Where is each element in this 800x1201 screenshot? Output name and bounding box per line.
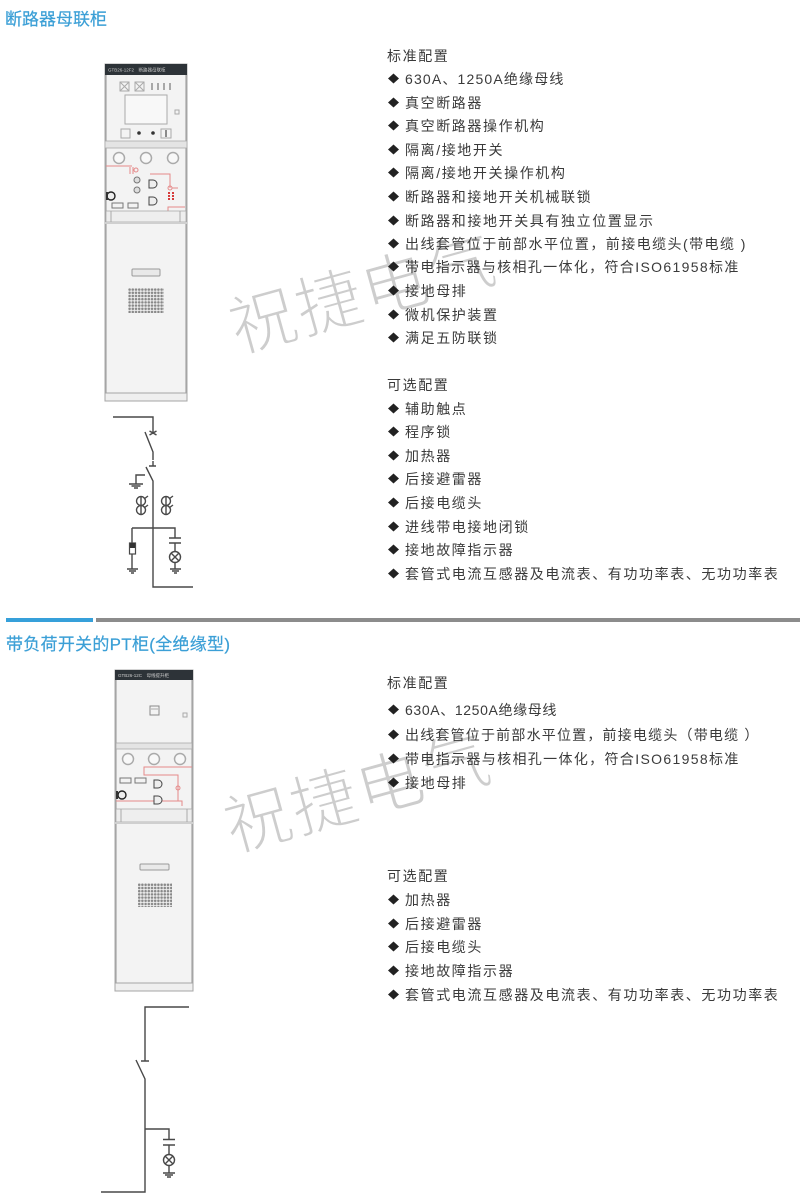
feature list: section 1 standard: 断路器和接地开关具有独立位置显示 bbox=[405, 213, 655, 229]
feature list: section 1 standard: 满足五防联锁 bbox=[405, 330, 499, 346]
feature list: section 2 standard: 接地母排 bbox=[405, 775, 467, 791]
feature list: section 1 standard: 隔离/接地开关 bbox=[405, 142, 504, 158]
feature list: section 1 standard bbox=[387, 48, 747, 346]
feature list: section 2 optional: 后接避雷器 bbox=[405, 916, 483, 932]
feature list: section 1 optional: 后接电缆头 bbox=[405, 495, 483, 511]
feature list: section 1 optional: 套管式电流互感器及电流表、有功功率表、无功功率表 bbox=[405, 566, 779, 582]
feature list: section 1 optional: 可选配置 bbox=[387, 377, 449, 393]
watermark: section 2: 祝捷电气 bbox=[211, 705, 501, 871]
feature list: section 1 standard: 真空断路器操作机构 bbox=[405, 118, 545, 134]
single-line diagram: section 1 bbox=[113, 417, 193, 587]
single-line diagram: section 2 bbox=[101, 1007, 189, 1192]
feature list: section 2 standard bbox=[387, 675, 760, 791]
section divider bbox=[6, 618, 800, 622]
heading: section 2: 带负荷开关的PT柜(全绝缘型) bbox=[6, 635, 230, 654]
feature list: section 1 standard: 微机保护装置 bbox=[405, 307, 499, 323]
heading: section 1: 断路器母联柜 bbox=[5, 10, 107, 29]
feature list: section 1 standard: 隔离/接地开关操作机构 bbox=[405, 165, 566, 181]
cabinet drawing: section 2: GTB26-12C 母线提升柜 bbox=[118, 672, 170, 679]
feature list: section 2 optional bbox=[387, 868, 779, 1003]
feature list: section 1 standard: 630A、1250A绝缘母线 bbox=[405, 71, 565, 87]
feature list: section 1 standard: 接地母排 bbox=[405, 283, 467, 299]
feature list: section 2 optional: 可选配置 bbox=[387, 868, 449, 884]
feature list: section 2 optional: 后接电缆头 bbox=[405, 939, 483, 955]
feature list: section 1 standard: 带电指示器与核相孔一体化，符合ISO61958标准 bbox=[405, 259, 740, 275]
feature list: section 1 optional: 后接避雷器 bbox=[405, 471, 483, 487]
feature list: section 2 standard: 630A、1250A绝缘母线 bbox=[405, 702, 558, 718]
cabinet drawing: section 1 bbox=[105, 64, 187, 401]
feature list: section 2 optional: 套管式电流互感器及电流表、有功功率表、无功功率表 bbox=[405, 987, 779, 1003]
feature list: section 1 standard: 真空断路器 bbox=[405, 95, 483, 111]
cabinet drawing: section 2 bbox=[115, 670, 193, 991]
feature list: section 1 optional: 进线带电接地闭锁 bbox=[405, 519, 530, 535]
feature list: section 1 optional: 程序锁 bbox=[405, 424, 452, 440]
feature list: section 1 optional: 接地故障指示器 bbox=[405, 542, 514, 558]
feature list: section 1 standard: 断路器和接地开关机械联锁 bbox=[405, 189, 592, 205]
watermark: section 1: 祝捷电气 bbox=[216, 206, 506, 372]
feature list: section 2 standard: 出线套管位于前部水平位置，前接电缆头（带电缆 ） bbox=[405, 727, 760, 743]
feature list: section 2 optional: 加热器 bbox=[405, 892, 452, 908]
feature list: section 2 optional: 接地故障指示器 bbox=[405, 963, 514, 979]
feature list: section 2 standard: 标准配置 bbox=[387, 675, 449, 691]
feature list: section 1 standard: 标准配置 bbox=[387, 48, 449, 64]
feature list: section 1 optional: 加热器 bbox=[405, 448, 452, 464]
cabinet drawing: section 1: GTB26-12F2 断路器母联柜 bbox=[108, 66, 166, 74]
feature list: section 1 optional: 辅助触点 bbox=[405, 401, 467, 417]
feature list: section 2 standard: 带电指示器与核相孔一体化，符合ISO61958标准 bbox=[405, 751, 740, 767]
feature list: section 1 standard: 出线套管位于前部水平位置，前接电缆头(带电缆 ) bbox=[405, 236, 747, 252]
feature list: section 1 optional bbox=[387, 377, 779, 582]
